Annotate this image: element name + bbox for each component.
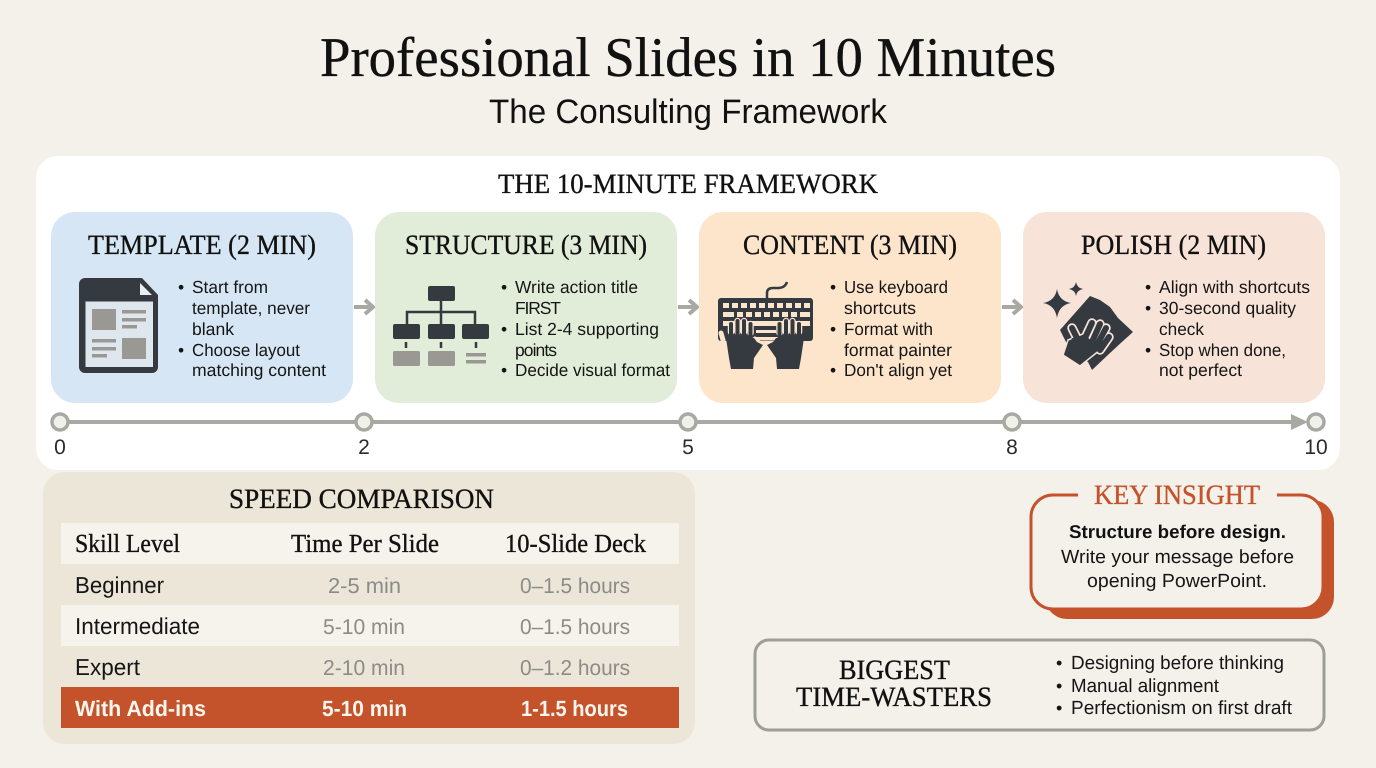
card: content bbox=[699, 212, 1001, 403]
comparison table: 10-Slide Deck bbox=[505, 529, 646, 558]
comparison table: With Add-ins bbox=[75, 696, 206, 721]
comparison table: Intermediate bbox=[75, 613, 200, 639]
time-wasters heading: TIME-WASTERS bbox=[796, 682, 992, 713]
callout: key insight bbox=[1031, 480, 1334, 619]
bullet list: structure bbox=[501, 277, 670, 380]
icon: org chart bbox=[393, 286, 489, 366]
timeline: 0 bbox=[54, 436, 66, 459]
time-wasters heading: BIGGEST bbox=[839, 655, 950, 686]
arrow: content to polish bbox=[1002, 300, 1021, 314]
comparison table: 2-5 min bbox=[328, 574, 401, 598]
panel heading: THE 10-MINUTE FRAMEWORK bbox=[498, 169, 878, 200]
bullet list: structure: FIRST bbox=[515, 298, 561, 318]
time-wasters list: • bbox=[1056, 653, 1062, 673]
bullet list: structure: • bbox=[501, 319, 507, 339]
bullet list: content: shortcuts bbox=[844, 298, 916, 318]
panel: biggest time-wasters bbox=[755, 640, 1324, 730]
arrow: template to structure bbox=[354, 300, 373, 314]
comparison table: 5-10 min bbox=[323, 615, 405, 639]
timeline: 5 bbox=[682, 436, 694, 459]
comparison table: Skill Level bbox=[75, 529, 180, 558]
icon: keyboard with hands bbox=[718, 282, 813, 369]
bullet list: template: blank bbox=[192, 319, 234, 339]
bullet list: structure: Write action title bbox=[515, 277, 638, 297]
card: polish bbox=[1023, 212, 1325, 403]
time-wasters list: Manual alignment bbox=[1071, 676, 1220, 697]
comparison table bbox=[61, 523, 679, 728]
timeline: 2 bbox=[358, 436, 370, 459]
bullet list: content: format painter bbox=[844, 340, 952, 360]
time-wasters list: Designing before thinking bbox=[1071, 653, 1284, 674]
time-wasters list: • bbox=[1056, 676, 1062, 696]
icon: document template bbox=[79, 278, 158, 373]
time-wasters list: Perfectionism on first draft bbox=[1071, 698, 1293, 719]
timeline bbox=[52, 414, 1328, 459]
bullet list: template: Choose layout bbox=[192, 340, 300, 360]
bullet list: template: • bbox=[178, 277, 184, 297]
subtitle: The Consulting Framework bbox=[489, 93, 888, 131]
bullet list: structure: points bbox=[515, 340, 557, 360]
bullet list: content: • bbox=[830, 277, 836, 297]
bullet list: template: matching content bbox=[192, 360, 326, 380]
comparison table: Expert bbox=[75, 654, 141, 680]
comparison table: 5-10 min bbox=[322, 696, 407, 721]
bullet list: polish: • bbox=[1145, 277, 1151, 297]
comparison table: 2-10 min bbox=[323, 656, 405, 680]
bullet list: content: • bbox=[830, 360, 836, 380]
card: polish: POLISH (2 MIN) bbox=[1081, 230, 1266, 261]
callout: key insight: KEY INSIGHT bbox=[1094, 480, 1260, 511]
bullet list: polish: 30-second quality bbox=[1159, 298, 1296, 318]
comparison table: 0–1.5 hours bbox=[520, 574, 630, 598]
card: template: TEMPLATE (2 MIN) bbox=[88, 230, 316, 261]
bullet list: polish: • bbox=[1145, 298, 1151, 318]
time-wasters list: • bbox=[1056, 698, 1062, 718]
callout: key insight: Write your message before bbox=[1061, 547, 1294, 568]
bullet list: content: • bbox=[830, 319, 836, 339]
icon: cloth and sparkles bbox=[1043, 282, 1133, 370]
bullet list: structure: • bbox=[501, 277, 507, 297]
bullet list: content: Don't align yet bbox=[844, 360, 952, 380]
bullet list: polish: Align with shortcuts bbox=[1159, 277, 1310, 297]
bullet list: polish: check bbox=[1159, 319, 1204, 339]
bullet list: template: Start from bbox=[192, 277, 268, 297]
bullet list: content: Format with bbox=[844, 319, 933, 339]
bullet list: structure: List 2-4 supporting bbox=[515, 319, 659, 339]
card: template bbox=[51, 212, 353, 403]
comparison table: 1-1.5 hours bbox=[521, 696, 628, 721]
comparison table: Beginner bbox=[75, 572, 164, 598]
bullet list: polish: • bbox=[1145, 340, 1151, 360]
bullet list: template bbox=[178, 277, 326, 380]
arrow: structure to content bbox=[678, 300, 697, 314]
callout: key insight: opening PowerPoint. bbox=[1087, 571, 1267, 592]
time-wasters list bbox=[1056, 653, 1293, 719]
comparison table: Time Per Slide bbox=[291, 529, 439, 558]
card: structure bbox=[375, 212, 677, 403]
bullet list: template: • bbox=[178, 340, 184, 360]
bullet list: template: template, never bbox=[192, 298, 310, 318]
comparison table: 0–1.2 hours bbox=[520, 656, 630, 680]
timeline: 8 bbox=[1006, 436, 1018, 459]
bullet list: structure: • bbox=[501, 360, 507, 380]
panel: speed comparison bbox=[43, 472, 695, 744]
title: Professional Slides in 10 Minutes bbox=[320, 27, 1056, 89]
bullet list: polish: not perfect bbox=[1159, 360, 1242, 380]
card: content: CONTENT (3 MIN) bbox=[743, 230, 957, 261]
bullet list: polish: Stop when done, bbox=[1159, 340, 1286, 360]
panel: 10-minute framework bbox=[36, 156, 1340, 470]
bullet list: content bbox=[830, 277, 952, 380]
bullet list: content: Use keyboard bbox=[844, 277, 948, 297]
bullet list: polish bbox=[1145, 277, 1310, 380]
table heading: SPEED COMPARISON bbox=[229, 484, 494, 515]
timeline: 10 bbox=[1304, 436, 1328, 459]
card: structure: STRUCTURE (3 MIN) bbox=[405, 230, 647, 261]
time-wasters heading bbox=[796, 655, 992, 713]
comparison table: 0–1.5 hours bbox=[520, 615, 630, 639]
callout: key insight: Structure before design. bbox=[1069, 521, 1286, 542]
bullet list: structure: Decide visual format bbox=[515, 360, 670, 380]
